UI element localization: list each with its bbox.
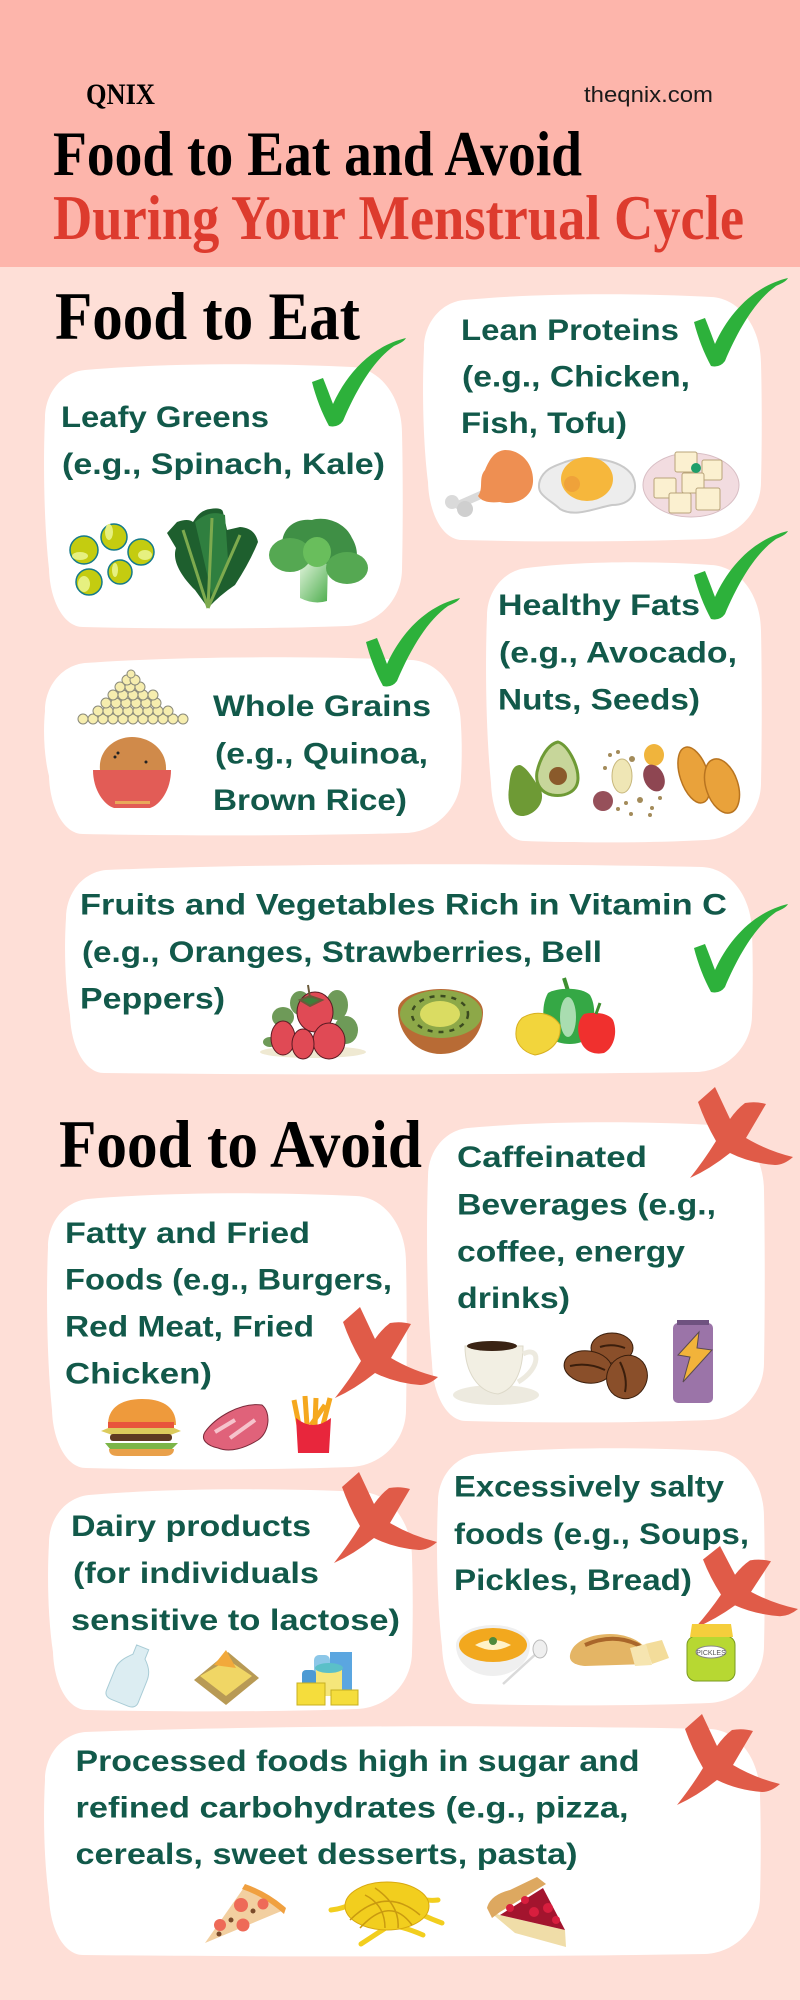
icon: steak: [203, 1405, 268, 1450]
icon: pickle jar: PICKLES: [696, 1650, 726, 1657]
panel: lean proteins: [423, 278, 788, 541]
text: [61, 401, 385, 481]
text: (e.g., Oranges, Strawberries, Bell: [82, 936, 602, 969]
text: foods (e.g., Soups,: [454, 1518, 749, 1551]
icon: french fries: [294, 1396, 331, 1453]
text: Pickles, Bread): [454, 1564, 692, 1597]
icon: check mark: [366, 598, 460, 686]
text: Excessively salty: [454, 1470, 724, 1504]
text: Beverages (e.g.,: [457, 1188, 716, 1222]
icon: quinoa pile: [78, 670, 188, 724]
text: Healthy Fats: [498, 589, 700, 622]
text: Dairy products: [71, 1510, 311, 1543]
text: Lean Proteins: [461, 314, 679, 347]
panel: healthy fats: [486, 531, 788, 842]
icon: coffee beans: [562, 1333, 654, 1405]
text: Whole Grains: [213, 690, 431, 723]
icon: kale: [167, 508, 258, 608]
icon: fried egg: [539, 457, 635, 513]
title line 1: Food to Eat and Avoid: [53, 119, 582, 189]
text: Caffeinated: [457, 1141, 647, 1174]
icon: brussels sprouts: [70, 524, 154, 595]
icon: cross mark: [690, 1087, 793, 1178]
icon: pasta: [331, 1882, 442, 1944]
text: (e.g., Avocado,: [499, 636, 737, 670]
icon: milk bottle: [104, 1641, 158, 1709]
text: (e.g., Quinoa,: [215, 738, 428, 770]
text: [213, 690, 431, 817]
panel: fruits and vegetables: [65, 864, 788, 1074]
text: Brown Rice): [213, 784, 407, 817]
icon: cross mark: [677, 1714, 780, 1805]
icon: dairy group: [297, 1652, 358, 1705]
text: [71, 1510, 400, 1637]
icon: cross mark: [695, 1546, 798, 1628]
icon: check mark: [312, 338, 406, 426]
icon: pie slice: [487, 1877, 566, 1947]
icon: cross mark: [334, 1472, 437, 1563]
icon: burger: [101, 1399, 181, 1456]
icon: check mark: [694, 531, 788, 619]
panel: leafy greens: [44, 338, 406, 628]
panel: dairy products: [48, 1472, 437, 1711]
website: theqnix.com: [584, 82, 713, 107]
text: Peppers): [80, 982, 225, 1016]
text: sensitive to lactose): [71, 1604, 400, 1637]
text: drinks): [457, 1282, 570, 1315]
panel: whole grains: [44, 598, 462, 835]
text: Red Meat, Fried: [65, 1310, 314, 1344]
text: refined carbohydrates (e.g., pizza,: [76, 1792, 628, 1824]
text: Foods (e.g., Burgers,: [65, 1264, 392, 1296]
icon: cross mark: [335, 1307, 438, 1398]
text: Fish, Tofu): [461, 407, 627, 440]
icon: coffee cup: [453, 1341, 539, 1405]
icon: soup bowl: [456, 1625, 547, 1684]
text: Leafy Greens: [61, 401, 269, 434]
heading: food to eat: Food to Eat: [55, 278, 360, 354]
icon: pizza slice: [205, 1884, 286, 1943]
icon: check mark: [694, 278, 788, 366]
panel: caffeinated beverages: [427, 1087, 793, 1422]
heading: food to avoid: Food to Avoid: [59, 1106, 422, 1182]
text: coffee, energy: [457, 1236, 685, 1268]
text: Chicken): [65, 1358, 212, 1390]
icon: check mark: [694, 904, 788, 992]
icon: peppers: [516, 978, 615, 1055]
icon: peanuts: [672, 743, 746, 818]
text: [498, 589, 737, 716]
panel: excessively salty foods: [437, 1448, 798, 1705]
text: [80, 888, 727, 1016]
panel: processed foods: [44, 1714, 780, 1956]
text: [457, 1141, 716, 1315]
header banner: [0, 0, 800, 267]
text: [461, 314, 690, 440]
icon: avocados: [508, 742, 578, 816]
icon: tofu plate: [643, 452, 739, 517]
text: [76, 1745, 640, 1871]
icon: pickle jar: [687, 1624, 735, 1681]
text: [65, 1217, 392, 1390]
icon: bread: [570, 1634, 669, 1666]
text: (for individuals: [73, 1557, 319, 1590]
text: Processed foods high in sugar and: [76, 1745, 640, 1778]
icon: energy drink can: [673, 1320, 713, 1403]
icon: cheese board: [194, 1650, 259, 1705]
icon: rice bowl: [93, 737, 171, 808]
text: (e.g., Spinach, Kale): [62, 448, 385, 481]
icon: kiwi: [398, 989, 483, 1054]
icon: strawberries: [260, 985, 366, 1059]
text: Fruits and Vegetables Rich in Vitamin C: [80, 888, 727, 922]
text: Nuts, Seeds): [498, 684, 700, 716]
text: (e.g., Chicken,: [462, 360, 690, 394]
text: Fatty and Fried: [65, 1217, 310, 1250]
brand logo: QNIX: [86, 78, 155, 111]
text: cereals, sweet desserts, pasta): [76, 1838, 578, 1871]
icon: chicken leg: [445, 450, 533, 517]
text: [454, 1470, 749, 1597]
icon: broccoli: [269, 519, 368, 602]
icon: mixed nuts: [593, 744, 669, 817]
panel: fatty and fried foods: [47, 1193, 438, 1469]
